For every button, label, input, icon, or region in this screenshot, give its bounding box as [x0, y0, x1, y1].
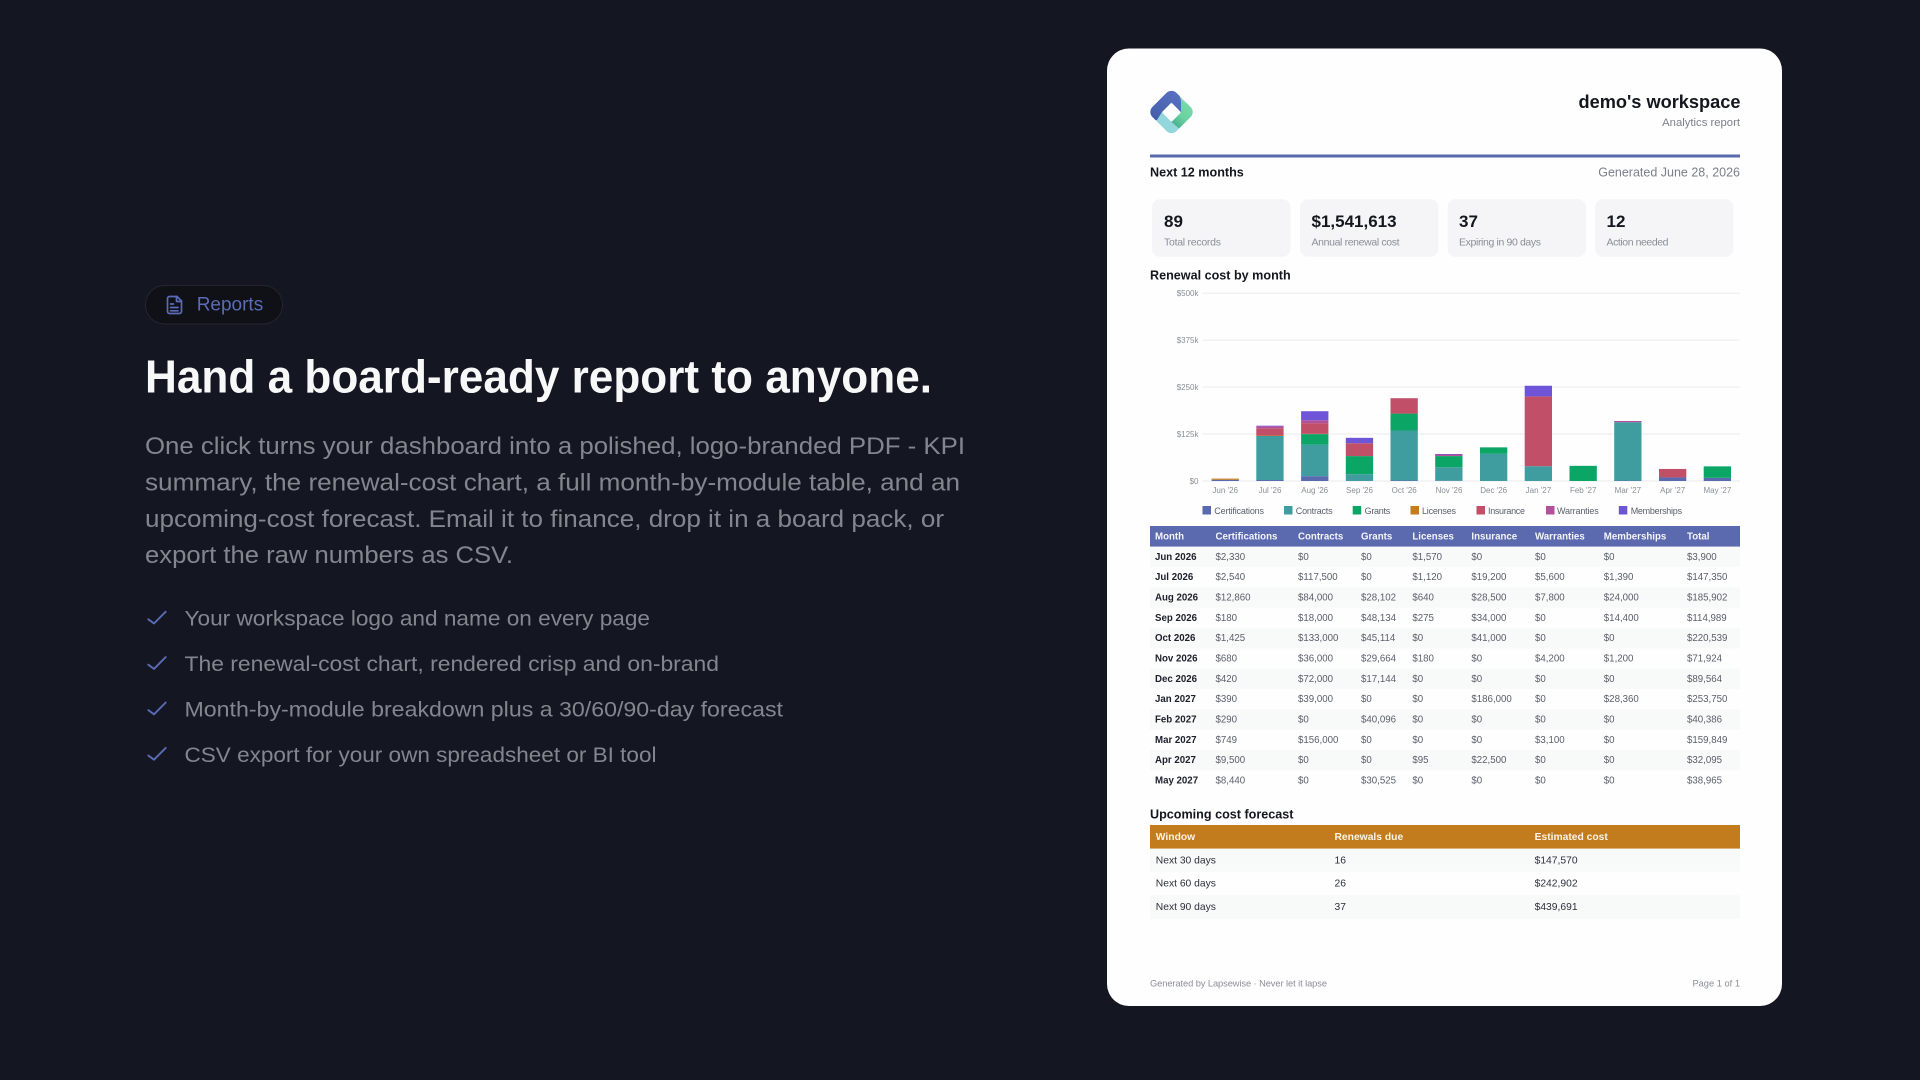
row: next 30 days: 16: [1334, 855, 1346, 866]
row: Jan 2027: $0: [1535, 694, 1546, 705]
row: next 90 days: Next 90 days: [1156, 902, 1216, 913]
chart legend: Warranties: [1557, 506, 1599, 516]
bullet: logo and name: Your workspace logo and name on every page: [184, 607, 650, 631]
row: Oct 2026: $220,539: [1687, 633, 1727, 644]
row: Oct 2026: $133,000: [1298, 633, 1339, 644]
forecast table: [1150, 825, 1740, 919]
x axis labels: Aug '26: [1301, 486, 1329, 495]
row: Dec 2026: $89,564: [1687, 674, 1723, 685]
bars: contracts: [1256, 422, 1642, 481]
row: Jun 2026: Jun 2026: [1155, 552, 1197, 563]
row: May 2027: May 2027: [1155, 775, 1198, 786]
table header row: Licenses: [1412, 532, 1454, 542]
x axis labels: Jun '26: [1212, 486, 1239, 495]
row: next 90 days: $439,691: [1535, 902, 1578, 913]
row: Apr 2027: $9,500: [1216, 755, 1246, 766]
row: Jan 2027: $253,750: [1687, 694, 1728, 705]
row: Dec 2026: $0: [1535, 674, 1546, 685]
KPI: action needed: Action needed: [1606, 237, 1669, 249]
table header row: Warranties: [1535, 532, 1585, 542]
row: Nov 2026: $36,000: [1298, 654, 1334, 664]
chart legend: Contracts: [1296, 506, 1333, 516]
row: Jul 2026: $1,390: [1604, 572, 1634, 583]
row: Oct 2026: $1,425: [1216, 633, 1245, 644]
row: Jun 2026: $1,570: [1412, 552, 1443, 563]
row: May 2027: $38,965: [1687, 775, 1722, 786]
row: Aug 2026: $24,000: [1604, 592, 1639, 604]
row: Mar 2027: $0: [1604, 735, 1615, 746]
row: Mar 2027: $3,100: [1535, 735, 1565, 746]
row: Nov 2026: $1,200: [1604, 654, 1634, 664]
row: Jul 2026: $117,500: [1298, 572, 1338, 583]
row: Apr 2027: $0: [1535, 755, 1546, 766]
bullet: chart: The renewal-cost chart, rendered crisp and on-brand: [184, 652, 719, 676]
row: Oct 2026: $0: [1535, 633, 1546, 644]
report footer: Page 1 of 1: [1692, 978, 1740, 988]
chart legend: Licenses: [1422, 506, 1456, 516]
KPI: action needed: [1595, 199, 1734, 257]
stacked bar chart: renewal cost by month: [1177, 289, 1740, 516]
row: Jun 2026: $3,900: [1687, 552, 1717, 563]
row: Nov 2026: Nov 2026: [1155, 654, 1198, 664]
y axis labels: $375k: [1177, 336, 1200, 345]
heading: Hand a board-ready report to anyone.: [145, 351, 932, 403]
row: Sep 2026: $18,000: [1298, 613, 1334, 624]
description paragraph: [145, 433, 965, 569]
row: Dec 2026: $17,144: [1361, 674, 1397, 685]
report header: [1150, 90, 1740, 134]
period row: Next 12 months: [1150, 165, 1244, 179]
y axis labels: $0: [1190, 477, 1199, 486]
row: Jan 2027: $0: [1412, 694, 1424, 705]
row: Aug 2026: $28,102: [1361, 592, 1396, 604]
row: Oct 2026: $41,000: [1471, 633, 1507, 644]
row: Jan 2027: Jan 2027: [1155, 694, 1196, 705]
row: Jan 2027: $28,360: [1604, 694, 1639, 705]
row: May 2027: $0: [1535, 775, 1546, 786]
chart legend: [1202, 506, 1682, 516]
table header row: Month: [1155, 532, 1184, 542]
row: Sep 2026: $180: [1216, 613, 1238, 624]
row: Sep 2026: $48,134: [1361, 613, 1397, 624]
x axis labels: Jan '27: [1526, 486, 1552, 495]
row: Dec 2026: $0: [1412, 674, 1424, 685]
chart legend: Insurance: [1488, 506, 1525, 516]
row: Dec 2026: $0: [1604, 674, 1615, 685]
bars: grants: [1301, 414, 1731, 481]
report footer: [1150, 978, 1740, 988]
row: Mar 2027: $0: [1361, 735, 1372, 746]
row: Nov 2026: $180: [1412, 654, 1435, 664]
chart legend: Grants: [1365, 506, 1391, 516]
KPI: total records: 89: [1164, 212, 1183, 231]
row: Dec 2026: $72,000: [1298, 674, 1334, 685]
row: Jan 2027: $186,000: [1471, 694, 1512, 705]
row: Jun 2026: $0: [1298, 552, 1309, 563]
x axis labels: Jul '26: [1259, 486, 1282, 495]
row: Nov 2026: $0: [1471, 654, 1483, 664]
row: Jun 2026: $2,330: [1216, 552, 1246, 563]
y axis labels: $250k: [1177, 383, 1200, 392]
row: next 60 days: $242,902: [1535, 879, 1578, 890]
x axis labels: May '27: [1704, 486, 1732, 495]
KPI: annual renewal cost: $1,541,613: [1312, 212, 1397, 231]
row: next 60 days: Next 60 days: [1156, 879, 1216, 890]
row: Aug 2026: $84,000: [1298, 592, 1334, 604]
row: Sep 2026: Sep 2026: [1155, 613, 1198, 624]
row: Sep 2026: $0: [1535, 613, 1546, 624]
chart heading: Renewal cost by month: [1150, 268, 1291, 282]
row: Jul 2026: $0: [1361, 572, 1372, 583]
description paragraph: export the raw numbers as CSV.: [145, 542, 513, 569]
table header row: Total: [1687, 532, 1709, 542]
row: Sep 2026: $275: [1412, 613, 1434, 624]
description paragraph: One click turns your dashboard into a polished, logo-branded PDF - KPI: [145, 433, 965, 460]
y axis labels: $500k: [1177, 289, 1200, 298]
row: Sep 2026: $34,000: [1471, 613, 1507, 624]
table header row: Grants: [1361, 532, 1392, 542]
row: Jul 2026: $147,350: [1687, 572, 1728, 583]
month-by-module table: [1150, 526, 1740, 786]
y axis labels: [1177, 289, 1200, 486]
row: Nov 2026: $4,200: [1535, 654, 1565, 664]
x axis labels: Dec '26: [1480, 486, 1508, 495]
row: Apr 2027: $22,500: [1471, 755, 1507, 766]
row: Jun 2026: $0: [1604, 552, 1615, 563]
x axis labels: Nov '26: [1436, 486, 1463, 495]
row: Apr 2027: $0: [1361, 755, 1372, 766]
row: Apr 2027: $0: [1604, 755, 1615, 766]
KPI: total records: [1152, 199, 1290, 257]
forecast header row: Renewals due: [1334, 832, 1403, 843]
period row: Generated June 28, 2026: [1598, 165, 1740, 179]
row: next 90 days: 37: [1334, 902, 1346, 913]
report subtitle: Analytics report: [1662, 117, 1741, 129]
row: May 2027: $30,525: [1361, 775, 1396, 786]
row: next 60 days: 26: [1334, 879, 1346, 890]
row: Mar 2027: $0: [1471, 735, 1483, 746]
KPI: action needed: 12: [1606, 212, 1625, 231]
bullet: CSV export: CSV export for your own spreadsheet or BI tool: [184, 743, 656, 767]
workspace name: demo's workspace: [1578, 92, 1740, 112]
x axis labels: Sep '26: [1346, 486, 1373, 495]
row: Mar 2027: $749: [1216, 735, 1237, 746]
bars: memberships: [1256, 386, 1552, 454]
row: Mar 2027: $159,849: [1687, 735, 1727, 746]
row: May 2027: $0: [1471, 775, 1483, 786]
row: Oct 2026: $0: [1604, 633, 1615, 644]
row: next 30 days: $147,570: [1535, 855, 1578, 866]
row: Dec 2026: $420: [1216, 674, 1238, 685]
forecast header row: Estimated cost: [1535, 832, 1608, 843]
row: Nov 2026: $71,924: [1687, 654, 1723, 664]
row: Aug 2026: Aug 2026: [1155, 592, 1199, 604]
row: Oct 2026: $0: [1412, 633, 1424, 644]
report footer: Generated by Lapsewise · Never let it lapse: [1150, 978, 1327, 988]
table header row: Certifications: [1216, 532, 1277, 542]
row: Jun 2026: $0: [1361, 552, 1372, 563]
bullet: breakdown and forecast: Month-by-module breakdown plus a 30/60/90-day forecast: [184, 697, 783, 721]
row: Feb 2027: $0: [1471, 714, 1483, 725]
x axis labels: Feb '27: [1570, 486, 1597, 495]
row: Jan 2027: $39,000: [1298, 694, 1334, 705]
row: Jan 2027: $390: [1216, 694, 1238, 705]
row: Apr 2027: $32,095: [1687, 755, 1722, 766]
badge: Reports: [146, 286, 282, 324]
bars: certifications: [1212, 476, 1731, 481]
row: Jul 2026: $19,200: [1471, 572, 1507, 583]
row: May 2027: $8,440: [1216, 775, 1246, 786]
row: May 2027: $0: [1604, 775, 1615, 786]
table header row: Memberships: [1604, 532, 1666, 542]
row: Feb 2027: $0: [1604, 714, 1615, 725]
row: Feb 2027: $40,386: [1687, 714, 1722, 725]
KPI: annual renewal cost: Annual renewal cost: [1312, 237, 1400, 249]
row: Mar 2027: Mar 2027: [1155, 735, 1196, 746]
badge: Reports: Reports: [197, 295, 263, 316]
row: Aug 2026: $640: [1412, 592, 1435, 604]
row: Jul 2026: $2,540: [1216, 572, 1246, 583]
row: Jun 2026: $0: [1471, 552, 1483, 563]
row: May 2027: $0: [1298, 775, 1309, 786]
KPI: expiring in 90 days: 37: [1459, 212, 1478, 231]
row: Jun 2026: $0: [1535, 552, 1546, 563]
row: Aug 2026: $185,902: [1687, 592, 1727, 604]
row: Jul 2026: $1,120: [1412, 572, 1443, 583]
row: Jan 2027: $0: [1361, 694, 1372, 705]
icon: document: [168, 296, 182, 314]
row: Oct 2026: $45,114: [1361, 633, 1396, 644]
row: Nov 2026: $680: [1216, 654, 1238, 664]
row: May 2027: $0: [1412, 775, 1424, 786]
row: Mar 2027: $156,000: [1298, 735, 1339, 746]
icon: workspace logo: [1150, 90, 1193, 134]
bars: insurance: [1256, 396, 1686, 477]
row: Dec 2026: $0: [1471, 674, 1483, 685]
x axis labels: [1212, 486, 1732, 495]
slide canvas: [145, 48, 1782, 1006]
chart legend: Memberships: [1631, 506, 1682, 516]
y axis labels: $125k: [1177, 430, 1200, 439]
row: Aug 2026: $12,860: [1216, 592, 1251, 604]
feature list: [148, 607, 783, 767]
row: Dec 2026: Dec 2026: [1155, 674, 1198, 685]
row: Oct 2026: Oct 2026: [1155, 633, 1196, 644]
row: Feb 2027: $40,096: [1361, 714, 1396, 725]
left copy panel: [145, 286, 965, 767]
description paragraph: upcoming-cost forecast. Email it to finance, drop it in a board pack, or: [145, 506, 944, 533]
row: Feb 2027: $0: [1535, 714, 1546, 725]
row: Jul 2026: Jul 2026: [1155, 572, 1194, 583]
row: Apr 2027: $0: [1298, 755, 1309, 766]
forecast header row: Window: [1156, 832, 1196, 843]
row: Apr 2027: $95: [1412, 755, 1429, 766]
row: Nov 2026: $29,664: [1361, 654, 1397, 664]
row: Aug 2026: $7,800: [1535, 592, 1565, 604]
bars: licenses: [1212, 434, 1328, 480]
KPI: expiring in 90 days: [1448, 199, 1586, 257]
KPI: annual renewal cost: [1300, 199, 1438, 257]
KPI: total records: Total records: [1164, 237, 1221, 249]
period row: [1150, 165, 1740, 179]
row: Jul 2026: $5,600: [1535, 572, 1565, 583]
x axis labels: Apr '27: [1660, 486, 1686, 495]
row: Feb 2027: Feb 2027: [1155, 714, 1196, 725]
row: Feb 2027: $290: [1216, 714, 1238, 725]
row: Sep 2026: $14,400: [1604, 613, 1639, 624]
x axis labels: Mar '27: [1615, 486, 1642, 495]
row: Mar 2027: $0: [1412, 735, 1424, 746]
row: Aug 2026: $28,500: [1471, 592, 1507, 604]
table header row: Insurance: [1471, 532, 1518, 542]
table header row: Contracts: [1298, 532, 1343, 542]
KPI: expiring in 90 days: Expiring in 90 days: [1459, 237, 1541, 249]
report page card: [1107, 48, 1782, 1006]
forecast heading: Upcoming cost forecast: [1150, 807, 1294, 821]
bars: warranties: [1256, 420, 1642, 456]
row: Feb 2027: $0: [1412, 714, 1424, 725]
row: Sep 2026: $114,989: [1687, 613, 1727, 624]
row: next 30 days: Next 30 days: [1156, 855, 1216, 866]
row: Apr 2027: Apr 2027: [1155, 755, 1196, 766]
chart legend: Certifications: [1214, 506, 1264, 516]
description paragraph: summary, the renewal-cost chart, a full month-by-module table, and an: [145, 469, 960, 496]
x axis labels: Oct '26: [1392, 486, 1417, 495]
row: Feb 2027: $0: [1298, 714, 1309, 725]
